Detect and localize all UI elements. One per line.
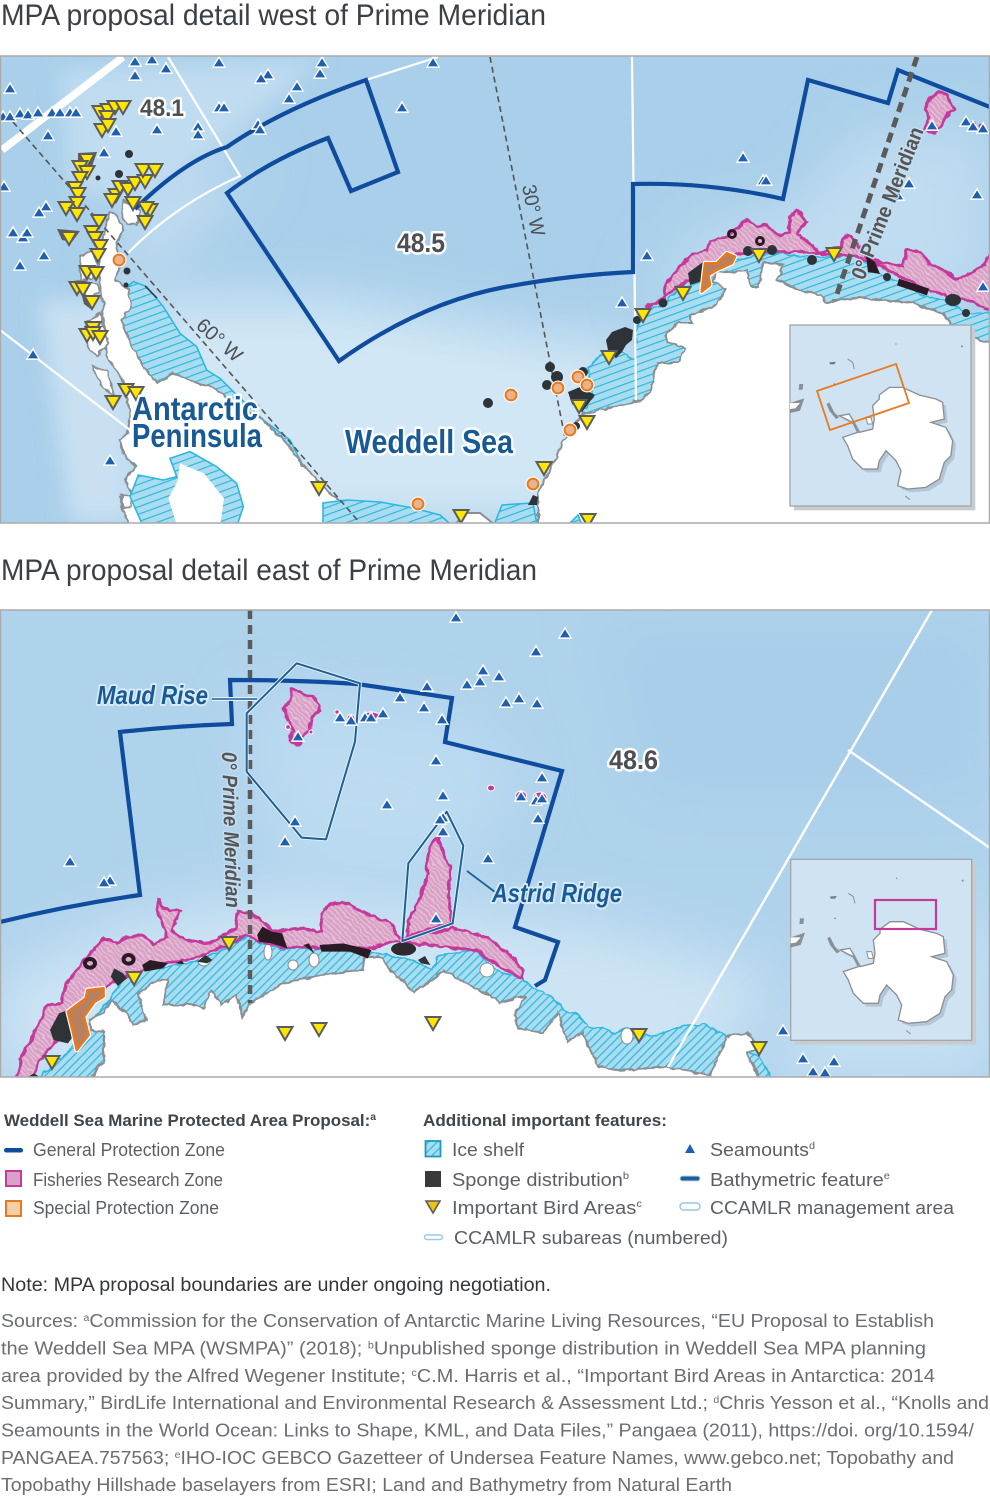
fisheries research zone east bbox=[16, 688, 547, 1078]
sources: C.M. Harris et al., “Important Bird Areas in Antarctica: 2014 bbox=[417, 1365, 935, 1386]
sources: d bbox=[713, 1395, 719, 1406]
label: prime meridian east: 0° Prime Meridian bbox=[217, 752, 244, 908]
panel frame east bbox=[0, 610, 990, 1077]
legend item: bathymetric feature: Bathymetric feature bbox=[710, 1170, 866, 1190]
special protection zone bbox=[702, 253, 735, 292]
meridian dashed lines bbox=[13, 57, 565, 523]
prime meridian line bbox=[835, 57, 917, 300]
legend item: CCAMLR subareas: CCAMLR subareas (numbered) bbox=[454, 1228, 728, 1248]
legend item: sponge distribution: b bbox=[623, 1171, 629, 1182]
prime meridian line east bbox=[248, 610, 252, 1003]
label: subarea 48.6: 48.6 bbox=[609, 745, 658, 775]
small pink seamount areas bbox=[286, 710, 547, 804]
legend item: CCAMLR management area: CCAMLR management area bbox=[710, 1198, 955, 1218]
sources: c bbox=[411, 1368, 417, 1379]
label: subarea 48.5: 48.5 bbox=[397, 228, 445, 258]
title: east map heading: MPA proposal detail east of Prime Meridian bbox=[1, 554, 537, 587]
legend item: seamounts: d bbox=[809, 1141, 815, 1152]
legend item: general protection zone: General Protection Zone bbox=[33, 1140, 225, 1160]
ice shelves: southern peninsula and Ronne bbox=[130, 452, 582, 530]
legend heading: proposal: a bbox=[370, 1112, 376, 1123]
legend item: important bird areas: c bbox=[636, 1199, 642, 1210]
land: East Antarctic coast bbox=[538, 263, 990, 530]
inset locator map east bbox=[791, 859, 976, 1045]
sources: Sources: bbox=[1, 1310, 74, 1331]
important bird areas east bbox=[44, 937, 766, 1069]
sources: PANGAEA.757563; bbox=[1, 1447, 161, 1468]
ice-free islands in shelf bbox=[198, 944, 633, 1044]
land: Antarctic Peninsula bbox=[74, 198, 340, 522]
legend item: ice shelf bbox=[426, 1140, 525, 1160]
peninsula west-side islands bbox=[76, 200, 140, 507]
sources: Seamounts in the World Ocean: Links to Shape, KML, and Data Files,” Pangaea (2011), https://doi. org/10.1594/ bbox=[1, 1420, 975, 1440]
fisheries research zone bbox=[647, 210, 990, 312]
seamounts east bbox=[63, 611, 841, 1078]
label: 30 W: 30° W bbox=[517, 183, 549, 238]
sources: Topobathy Hillshade baselayers from ESRI; Land and Bathymetry from Natural Earth bbox=[1, 1474, 732, 1495]
inset locator map west bbox=[790, 325, 975, 510]
white subarea lines east bbox=[668, 610, 990, 1067]
gray coast fragments under bird markers bbox=[57, 152, 97, 310]
legend heading: proposal: Weddell Sea Marine Protected Area Proposal: bbox=[4, 1112, 361, 1130]
white subarea lines bbox=[0, 56, 636, 430]
label: Antarctic Peninsula: Peninsula bbox=[132, 417, 263, 454]
legend item: seamounts: Seamounts bbox=[710, 1140, 801, 1160]
legend item: important bird areas: Important Bird Areas bbox=[452, 1198, 616, 1218]
special protection zone east bbox=[68, 988, 104, 1050]
note: Note: MPA proposal boundaries are under ongoing negotiation. bbox=[1, 1275, 551, 1296]
label: Antarctic Peninsula bbox=[132, 394, 262, 448]
label: prime meridian: 0° Prime Meridian bbox=[847, 124, 929, 283]
label: 60 W: 60° W bbox=[192, 314, 247, 367]
label: Maud Rise: Maud Rise bbox=[97, 680, 208, 710]
label: subarea 48.1: 48.1 bbox=[140, 95, 184, 122]
Filchner and east ice shelf bbox=[582, 253, 990, 430]
legend item: special protection zone: Special Protection Zone bbox=[33, 1198, 219, 1218]
panel frame west bbox=[0, 56, 990, 523]
legend item: bathymetric feature: e bbox=[884, 1171, 890, 1182]
legend item: fisheries research zone: Fisheries Research Zone bbox=[33, 1170, 223, 1190]
sponge distribution bbox=[96, 150, 970, 505]
general protection zone boundary east bbox=[0, 680, 562, 986]
sources: Commission for the Conservation of Antarctic Marine Living Resources, “EU Proposal to Establish bbox=[89, 1310, 934, 1331]
panel: map east of Prime Meridian bbox=[0, 610, 990, 1085]
legend item: ice shelf: Ice shelf bbox=[452, 1140, 525, 1160]
sources bbox=[1, 1310, 989, 1495]
label: Astrid Ridge: Astrid Ridge bbox=[491, 878, 622, 908]
Astrid Ridge and Maud Rise pink areas bbox=[283, 688, 450, 937]
sources: Unpublished sponge distribution in Weddell Sea MPA planning bbox=[374, 1338, 926, 1358]
legend item: sponge distribution: Sponge distribution bbox=[452, 1170, 606, 1190]
label: Weddell Sea: Weddell Sea bbox=[345, 423, 514, 460]
sources: area provided by the Alfred Wegener Institute; bbox=[1, 1365, 377, 1386]
sources: IHO-IOC GEBCO Gazetteer of Undersea Feature Names, www.gebco.net; Topobathy and bbox=[181, 1447, 954, 1468]
sources: a bbox=[84, 1313, 90, 1324]
panel: map west of Prime Meridian bbox=[0, 53, 990, 530]
sources: e bbox=[175, 1450, 181, 1461]
sponge distribution east bbox=[29, 927, 430, 1077]
legend bbox=[4, 1112, 955, 1248]
leader lines bbox=[212, 699, 495, 892]
sources: Summary,” BirdLife International and Environmental Research & Assessment Ltd.; bbox=[1, 1392, 672, 1413]
important bird areas bbox=[58, 101, 842, 527]
special protection zone circles bbox=[112, 252, 594, 512]
sources: the Weddell Sea MPA (WSMPA)” (2018); bbox=[1, 1338, 335, 1358]
Maud Rise pink area bbox=[925, 92, 955, 133]
seamounts bbox=[0, 53, 990, 466]
seamount ridge pink spots bbox=[970, 121, 982, 128]
ice shelves east bbox=[41, 935, 770, 1082]
general protection zone boundary bbox=[135, 70, 990, 361]
label: Antarctic Peninsula: Antarctic bbox=[132, 390, 258, 427]
legend heading: additional features: Additional important features: bbox=[423, 1112, 667, 1130]
sources: b bbox=[368, 1340, 374, 1352]
bathymetric feature outlines bbox=[247, 663, 463, 941]
sources: Chris Yesson et al., “Knolls and bbox=[719, 1392, 989, 1413]
Larsen ice shelf bbox=[122, 280, 312, 474]
land: East Antarctic coast, east map bbox=[86, 958, 762, 1085]
